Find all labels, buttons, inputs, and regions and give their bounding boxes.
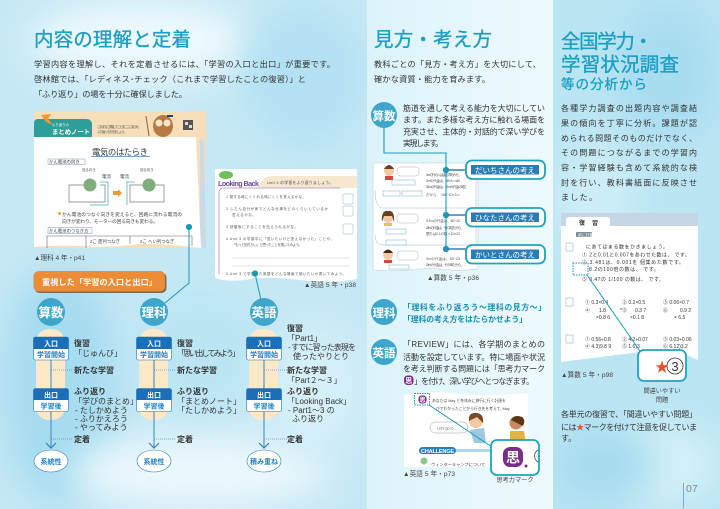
document thumbnail: 算数 p36: 3mの代金は、80÷23 <box>426 256 460 261</box>
text: 英語 description: 思 <box>405 377 412 385</box>
background: left panel wash <box>0 0 367 509</box>
document thumbnail: 理科 まとめノート: 電流 <box>102 173 111 180</box>
flow column: 理科: 新たな学習 <box>177 365 217 375</box>
document thumbnail: 算数 p98 復習: ② 4.2÷0.07 <box>622 336 648 343</box>
text: 各単元の復習: 各単元の復習で、「間違いやすい問題」 <box>561 409 697 419</box>
flow column: 算数: - たしかめよう <box>75 406 128 415</box>
caption: 間違いやすい問題: 間違いやすい <box>643 387 681 395</box>
caption: 算数5年 p36: ▲算数 5 年・p36 <box>427 273 479 282</box>
flow column: 英語: 入口 <box>257 340 271 348</box>
flow column: 英語: ふり返り <box>292 414 324 424</box>
intro text: middle <box>374 59 541 84</box>
text: right panel description <box>561 103 697 202</box>
flow column: 理科: 「たしかめよう」 <box>177 406 241 415</box>
caption: 間違いやすい問題 <box>643 387 681 404</box>
document thumbnail: 英語 Looking Back: 言えるかな。 <box>232 212 256 217</box>
text: 英語 description: 「REVIEW」には、各学期のまとめの <box>403 339 545 349</box>
flow column: 英語: 「Part２～３」 <box>287 376 342 385</box>
document thumbnail: 算数 p98 復習: ① 0.3×0.4 <box>585 299 608 306</box>
document thumbnail: 算数 p98 復習: ② 0.2×0.5 <box>622 299 645 306</box>
callout: かいとさんの考え <box>466 245 545 264</box>
document thumbnail: 算数 p98 復習: ③ 0.06×0.7 <box>663 299 689 306</box>
flow column: 理科: 学習開始 <box>140 350 168 359</box>
flow column: 英語: 「Looking Back」 <box>287 397 351 406</box>
callout: ひなたさんの考え <box>466 208 545 226</box>
document thumbnail: 算数 p98 復習: にあてはまる数をかきましょう。 <box>586 244 668 250</box>
callout: だいちさんの考え <box>466 160 545 179</box>
document thumbnail: 算数 p98 復習: ③ 0.03÷0.06 <box>663 336 692 343</box>
document thumbnail: 英語 Looking Back: 1 発する時にくぐれる時にくくを覚えるかな。 <box>226 194 306 199</box>
document thumbnail: 理科 まとめノート: ふり返っておきましょう。 <box>97 129 127 134</box>
document thumbnail: 理科 まとめノート: これまでに学習したことをここにまとめ、 <box>97 124 141 129</box>
document thumbnail: 算数 p98 復習: *⑤ <box>620 307 627 314</box>
document thumbnail: 英語 p73: びでわかったことから行き先を考えて, May <box>436 406 510 411</box>
flow column: 英語: 出口 <box>257 390 271 400</box>
document thumbnail: 英語 p73: ウィンターキャンプについて <box>431 461 485 468</box>
text: 理科 description <box>403 302 546 324</box>
intro text: middle: 確かな資質・能力を育みます。 <box>374 74 490 84</box>
document thumbnail: 英語 p73: Let's go to... <box>437 426 456 430</box>
flow column: 算数: 「じゅんび」 <box>74 349 122 358</box>
document thumbnail: 英語 p73: CHALLENGE <box>421 449 454 455</box>
document thumbnail: 算数 p98 復習: 8.2の100倍の数は、 です。 <box>589 266 659 273</box>
document thumbnail: 算数 p98 復習: ① 2と0.01と0.007をあわせた数は、 です。 <box>582 252 690 258</box>
callout: ひなたさんの考え: ひなたさんの考え <box>475 214 535 222</box>
document thumbnail: 理科 まとめノート: 回る向き <box>140 167 154 172</box>
flow column: 算数: 「学びのまとめ」 <box>74 396 138 406</box>
flow column: 英語: 新たな学習 <box>287 365 327 375</box>
icon: children <box>382 165 394 263</box>
document thumbnail: 算数 p98 復習: ① 0.56÷0.8 <box>585 336 611 343</box>
dotted highlight and connector <box>573 263 640 351</box>
flow column: 英語: 英語 <box>251 305 277 320</box>
flow column: 英語: 学習開始 <box>250 350 278 359</box>
document thumbnail: 算数 p36: 2.3mの代金は、その2倍だから、 <box>426 225 464 230</box>
background: middle panel <box>367 0 553 509</box>
text: 英語 description: を考え判断する問題には「思考力マーク <box>403 364 545 374</box>
flow column: 算数: 出口 <box>44 390 58 400</box>
text: right panel description: 果の傾向を丁寧に分析。課題が認 <box>561 118 697 128</box>
document thumbnail: 算数 p36 <box>373 163 478 271</box>
document thumbnail: 理科 まとめノート: 電気のはたらき <box>92 147 148 157</box>
document thumbnail: 算数 p98 復習 <box>561 213 698 362</box>
document thumbnail: 算数 p98 復習: ④ 4.3)9.8 9 <box>585 343 611 350</box>
flow column: 算数: 学習後 <box>40 402 62 410</box>
flow column: 理科: 「まとめノート」 <box>177 397 241 406</box>
title: 全国学力・学習状況調査 等の分析から: 等の分析から <box>561 76 647 92</box>
flow column: 理科: 学習後 <box>144 402 164 410</box>
flow column: 理科: 「思い出してみよう」 <box>177 348 240 358</box>
document thumbnail: 算数 p98 復習: ⑥ <box>663 307 668 314</box>
document thumbnail: 算数 p36: 間りは2.1の数＝10×23 <box>426 231 460 236</box>
flow column: 理科: 理科 <box>141 305 167 320</box>
document thumbnail: 算数 p98 復習: 復 習 <box>579 219 598 227</box>
document thumbnail: 理科 まとめノート: ふり返りの <box>52 122 70 127</box>
text: 英語 description: 」を付け、深い学びへとつなぎます。 <box>414 376 534 386</box>
caption: 理科4年: ▲理科 4 年・p41 <box>34 253 85 262</box>
text: right panel description: 討を行い、教科書紙面に反映させ <box>561 178 697 188</box>
text: 理科 description: 「理科をふり返ろう～理科の見方～」 <box>403 302 546 312</box>
caption: 算数5年 p98: ▲算数 5 年・p98 <box>561 370 613 379</box>
flow column: 英語: 復習 <box>287 323 303 333</box>
document thumbnail: 理科 まとめノート: 電流 <box>120 173 129 180</box>
document thumbnail: 英語 Looking Back: 3 部屋後にすることを伝えられるかな。 <box>226 224 298 229</box>
callout: かいとさんの考え: かいとさんの考え <box>475 250 535 260</box>
flow column: 算数: 新たな学習 <box>74 365 114 375</box>
document thumbnail: 算数 p98 復習: ×0.1 8 <box>630 315 644 321</box>
flow column: 理科: ふり返り <box>177 386 209 396</box>
text: 算数 description: 筋道を通して考える能力を大切にしてい <box>403 103 545 113</box>
flow column: 理科: 出口 <box>147 390 161 400</box>
document thumbnail: 算数 p98 復習: 1.8 <box>599 308 606 314</box>
connector: 理科 doc to 理科 circle <box>165 224 192 303</box>
flow column: 算数: - やってみよう <box>75 423 128 432</box>
document thumbnail: 英語 Looking Back: 2 ふだん自分が家でどんな仕事をどのくらいしているか <box>226 206 328 211</box>
document thumbnail: 算数 p98 復習: ⑤ 0.47の 1/100 の数は、 です。 <box>582 276 664 283</box>
text: 各単元の復習: す。 <box>561 434 576 443</box>
flow column: 算数: 学習開始 <box>37 350 65 359</box>
document thumbnail: 英語 Looking Back: 「もっと知りたい」と思ったことを書いてみよう。 <box>232 242 302 247</box>
page number: 07 <box>686 483 698 495</box>
circle: 英語: 英語 <box>372 346 396 360</box>
text: 各単元の復習 <box>561 409 697 443</box>
flow column: 算数: 算数 <box>38 305 64 320</box>
document thumbnail: 理科 まとめノート: 2こ へい列つなぎ <box>140 238 175 245</box>
document thumbnail: 理科 まとめノート: かん電池の向き <box>49 158 80 166</box>
flow column: 英語: 学習後 <box>254 402 274 410</box>
document thumbnail: 理科 まとめノート: まとめノート <box>52 128 90 136</box>
connector: 算数 to callouts <box>384 128 466 252</box>
callout: だいちさんの考え: だいちさんの考え <box>475 166 535 175</box>
flow column: 英語: - すでに習った表現を <box>288 342 356 352</box>
text: right panel description: 各種学力調査の出題内容や調査結 <box>561 103 697 113</box>
flow column: 算数: 定着 <box>74 434 90 444</box>
document thumbnail: 英語 p73: あなたは May と冬休みに旅行に行く計画を <box>432 398 506 403</box>
document thumbnail: 算数 p98 復習: × 6.5 <box>674 315 685 321</box>
document thumbnail: 英語 Looking Back: 4 Unit 3 の学習中に「言いたいけど言えなかった」ことや、 <box>226 236 334 241</box>
document thumbnail: 英語 Looking Back <box>215 169 357 282</box>
callout: 間違いやすい問題マーク <box>638 350 686 381</box>
document thumbnail: 英語 Looking Back: Looking Back <box>218 179 259 188</box>
flow column: 英語: 使ったやりとり <box>293 351 349 361</box>
text: right panel description: められる問題そのものだけでなく、 <box>561 134 697 143</box>
document thumbnail: 英語 p73: 思 <box>419 397 426 404</box>
flow column: 算数: ふり返り <box>74 386 106 396</box>
document thumbnail: 理科 まとめノート: 向きが変わり、モーターの回る向きも変わる。 <box>62 218 158 225</box>
document thumbnail: 算数 p36: 5.2mの代金は、2.1mの代金の5倍 <box>426 184 466 189</box>
intro text: middle: 教科ごとの「見方・考え方」を大切にして、 <box>374 59 541 69</box>
document thumbnail: 算数 p36: 1mの代の人は金を求めから、 <box>426 172 462 177</box>
flow column: 理科: 系統性 <box>144 457 164 466</box>
document thumbnail: 算数 p36: 5.1mの代金は、80÷10 <box>426 218 460 223</box>
circle: 算数 <box>371 102 397 128</box>
document thumbnail: 算数 p98 復習: 前に計算 <box>578 232 593 238</box>
text: 算数 description: 充実させ、主体的・対話的で深い学びを <box>403 126 545 136</box>
document thumbnail: 算数 p36: 2mの代金は、80×2＝140 <box>426 178 460 183</box>
icon: girls <box>469 413 526 443</box>
text: 英語 description <box>403 339 545 386</box>
title: 全国学力・学習状況調査 等の分析から <box>561 31 679 92</box>
text: 英語 description: 活動を設定しています。特に場面や状況 <box>403 352 545 362</box>
circle: 算数: 算数 <box>372 109 396 123</box>
flow column: 算数: 系統性 <box>40 457 62 466</box>
document thumbnail: 算数 p98 復習: ×0.8 6 <box>596 315 610 321</box>
intro text: 啓林館では、「レディネス･チェック（これまで学習したことの復習）」と <box>34 74 306 84</box>
connector: 英語 doc to 英語 circle <box>252 271 261 300</box>
flow column: 英語 <box>246 298 356 472</box>
circle: 英語 <box>371 339 397 365</box>
title: 見方・考え方: 見方・考え方 <box>374 29 492 51</box>
intro text: 「ふり返り」の場を十分に確保しました。 <box>34 89 187 99</box>
document thumbnail: 理科 まとめノート: 2こ 直列つなぎ <box>90 238 121 245</box>
callout: 思考力マーク: 思 <box>506 450 520 466</box>
callout: 間違いやすい問題マーク: ★ <box>655 359 669 375</box>
text: 理科 description: 「理科の考え方をはたらかせよう」 <box>403 314 527 324</box>
document thumbnail: 算数 p36: 2.1mの代金は、その 5/3 だから、 <box>426 262 464 267</box>
circle: 理科: 理科 <box>372 306 396 320</box>
flow column: 理科: 定着 <box>177 434 193 444</box>
intro text <box>34 59 335 99</box>
flow column: 算数: 入口 <box>44 340 58 348</box>
document thumbnail: 英語 Looking Back: Unit 3 の学習をふり返りましょう。 <box>267 180 333 185</box>
circle: 理科 <box>371 299 397 325</box>
document thumbnail: 英語 p73 <box>404 392 528 468</box>
text: 各単元の復習: には★マークを付けて注意を促していま <box>561 422 697 432</box>
text: 算数 description: 実現します。 <box>403 138 443 148</box>
callout: 思考力マーク <box>491 440 539 475</box>
flow column: 算数: - ふりかえろう <box>75 414 128 424</box>
callout: 間違いやすい問題マーク: 3 <box>671 359 679 374</box>
document thumbnail: 英語 Looking Back: 5 Unit 3 で学習した英語をどんな場面で使いたいか書いてみよう。 <box>226 271 346 276</box>
caption: 思考力マーク: 思考力マーク <box>496 476 534 484</box>
flow column: 算数 <box>34 298 138 472</box>
document thumbnail: 理科 まとめノート <box>34 111 206 248</box>
QR code <box>183 120 193 130</box>
page number <box>684 483 698 508</box>
flow column: 英語: 「Part1」 <box>287 334 322 343</box>
caption: 英語5年 p73: ▲英語 5 年・p73 <box>403 469 455 478</box>
flow column: 理科: 復習 <box>177 338 193 348</box>
document thumbnail: 理科 まとめノート: かん電池のつなぐ向きを変えると、回路に流れる電流の <box>62 211 182 218</box>
flow column: 英語: - Part1～3 の <box>288 406 335 415</box>
document thumbnail: 算数 p98 復習: 0.9 2 <box>680 308 691 314</box>
orange heading: 重視した「学習の入口と出口」: 重視した「学習の入口と出口」 <box>42 277 157 287</box>
title: 内容の理解と定着: 内容の理解と定着 <box>34 29 191 51</box>
document thumbnail: 算数 p98 復習: ④ <box>585 307 590 314</box>
caption: 英語5年: ▲英語 5 年・p38 <box>304 280 356 289</box>
intro text: 学習内容を理解し、それを定着させるには、「学習の入口と出口」が重要です。 <box>34 59 335 69</box>
orange heading: 重視した「学習の入口と出口」 <box>34 271 166 293</box>
flow column: 理科 <box>136 298 241 472</box>
flow column: 英語: 積み重ね <box>250 457 278 466</box>
document thumbnail: 算数 p98 復習: ⑤ 1.6)3 <box>622 343 640 350</box>
text: 算数 description <box>403 103 545 148</box>
document thumbnail: 算数 p36: だから、 160÷10×3＝ <box>426 192 460 197</box>
text: right panel description: ました。 <box>561 193 597 202</box>
text: 算数 description: ます。また多様な考え方に触れる場面を <box>403 114 545 124</box>
document thumbnail: 理科 まとめノート: 回る向き <box>82 167 96 172</box>
title: 全国学力・学習状況調査 等の分析から: 全国学力・ <box>561 31 653 53</box>
document thumbnail: 算数 p98 復習: 0.3 7 <box>635 308 646 314</box>
flow column: 算数: 復習 <box>74 338 90 348</box>
background: right panel wash <box>553 0 720 509</box>
flow column: 英語: ふり返り <box>287 386 319 396</box>
title: 全国学力・学習状況調査 等の分析から: 学習状況調査 <box>561 54 679 76</box>
document thumbnail: 理科 まとめノート: かん電池のつなぎ方 <box>49 228 89 234</box>
document thumbnail: 算数 p98 復習: ⑥ 6.12)3.2 <box>663 343 688 350</box>
text: right panel description: 容・学習経験も含めて系統的な検 <box>561 162 697 172</box>
text: right panel description: その問題につながるまでの学習内 <box>561 148 697 158</box>
flow column: 理科: 入口 <box>147 340 161 348</box>
document thumbnail: 算数 p98 復習: ② 3.481は、0.001を 個集めた数です。 <box>582 259 684 266</box>
caption: 間違いやすい問題: 問題 <box>656 397 668 404</box>
flow column: 英語: 定着 <box>287 434 303 444</box>
connector: 思 mark zoom <box>429 405 492 447</box>
icon: owl <box>146 115 173 137</box>
